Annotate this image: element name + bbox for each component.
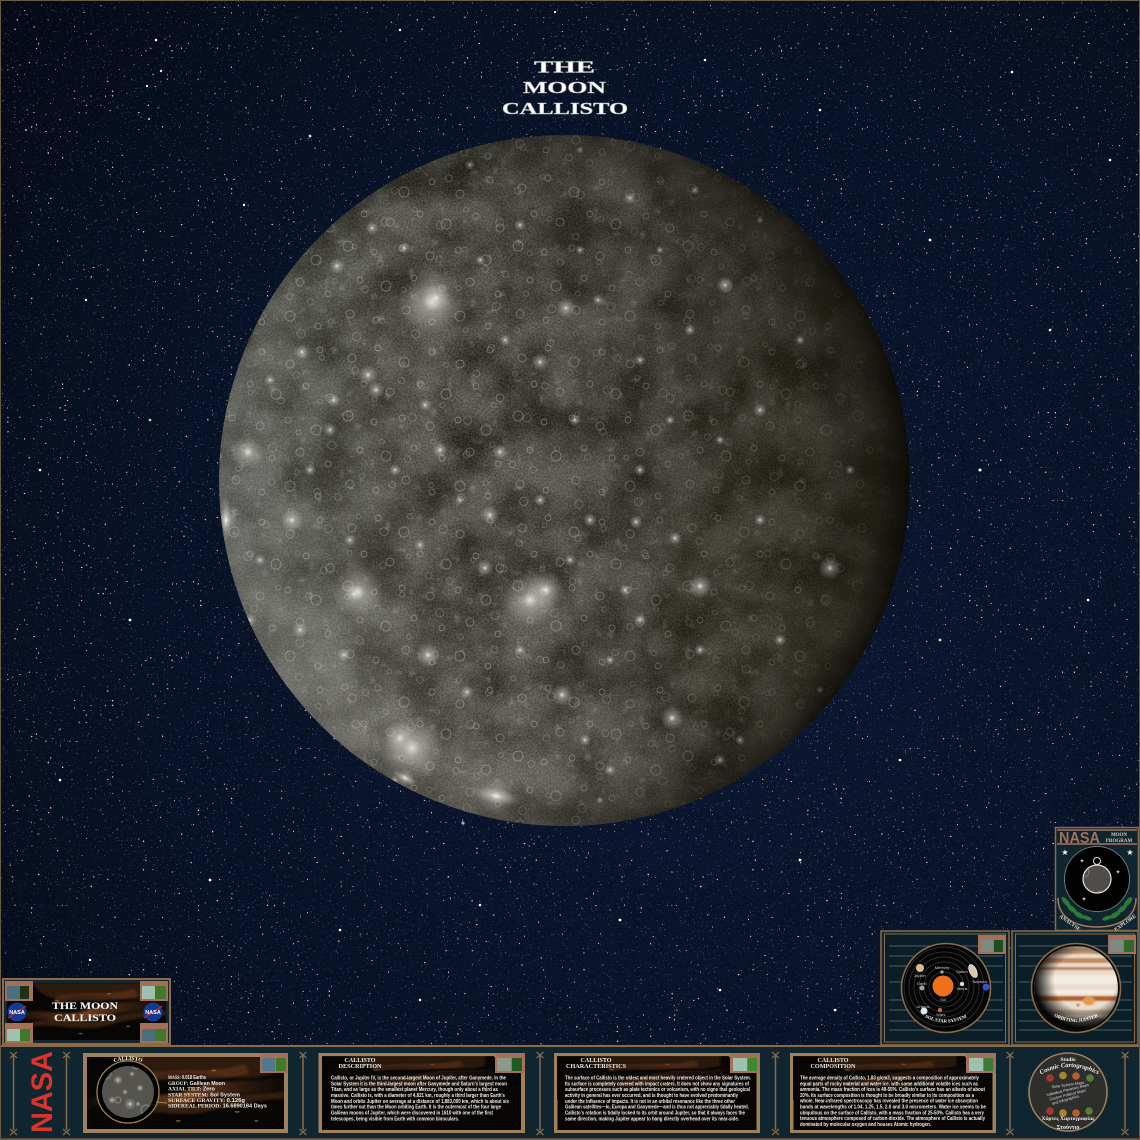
title: CALLISTO	[502, 99, 628, 118]
body text: subsurface processes such as plate tectonics or volcanism, with no signs that geological	[565, 1087, 750, 1093]
heading: CALLISTO	[580, 1057, 612, 1064]
corner tab	[966, 1053, 996, 1073]
patch badge with moon: ✦	[1081, 896, 1087, 903]
patch program label: PROGRAM	[1106, 839, 1132, 844]
body text: activity in general has ever occurred, and is thought to have evolved predominantly	[565, 1093, 738, 1099]
heading: CALLISTO	[344, 1057, 376, 1064]
patch program label: MOON	[1111, 833, 1127, 838]
patch badge with moon	[1064, 846, 1130, 912]
plaque corner tabs	[5, 981, 168, 1043]
moon thumbnail label	[109, 1060, 147, 1064]
body text: Callisto, or Jupiter IV, is the second-largest Moon of Jupiter, after Ganymede. In the	[331, 1076, 506, 1082]
body text: Titan, and as large as the smallest planet Mercury, though only about a third as	[331, 1087, 498, 1093]
medallion services: Solar System Maps	[1051, 1081, 1085, 1089]
surface tone	[219, 135, 911, 827]
heading	[338, 1057, 382, 1070]
title	[502, 58, 628, 118]
body text: telescopes, being visible from Earth with common binoculars.	[331, 1116, 459, 1122]
body text: equal parts of rocky material and water ice, with some additional volatile ices such as	[800, 1081, 978, 1087]
corner tab	[495, 1053, 525, 1073]
panel: sol star system	[880, 930, 1010, 1045]
corner tab	[978, 935, 1006, 954]
planet labels: Earth	[917, 981, 927, 986]
heading	[810, 1057, 856, 1070]
stats list: STAR SYSTEM: Sol System	[168, 1092, 240, 1098]
corner tab	[260, 1053, 288, 1073]
stats list: GROUP: Galilean Moon	[168, 1081, 225, 1087]
plaque heading: CALLISTO	[54, 1013, 116, 1023]
body text: tenuous atmosphere composed of carbon-dioxide. The atmosphere of Callisto is actually	[800, 1116, 985, 1122]
patch stars	[1061, 848, 1134, 857]
corner tab	[1108, 935, 1136, 954]
stats list	[168, 1075, 267, 1110]
body text: massive. Callisto is, with a diameter of 4,821 km, roughly a third larger than Earth's	[331, 1093, 505, 1099]
planet labels	[914, 965, 988, 1017]
body text: whole. Near-infrared spectroscopy has revealed the presence of water ice absorption	[799, 1099, 978, 1105]
patch motto: ANALYSE	[1058, 914, 1082, 933]
NASA worm logotype: NASA	[26, 1051, 59, 1133]
panel: description	[318, 1053, 525, 1133]
body text: bands at wavelengths of 1.04, 1.25, 1.5, 2.0 and 3.0 micrometers. Water ice seems to be	[800, 1104, 986, 1110]
corner tab	[730, 1053, 760, 1073]
NASA meatball left	[8, 1002, 26, 1022]
heading	[566, 1057, 627, 1070]
body text: Galilean moons of Jupiter, which were discovered in 1610 with one of the first	[331, 1111, 493, 1117]
medallion colored dots	[1046, 1072, 1094, 1117]
body text: 20%. Its surface composition is thought to be broadly similar to its composition as a	[800, 1093, 974, 1099]
stats list: MASS: 0.018 Earths	[168, 1075, 206, 1081]
medallion services: Individual Planetary Maps	[1046, 1083, 1089, 1097]
body text	[331, 1076, 509, 1122]
title plaque	[2, 978, 171, 1045]
body text: The surface of Callisto is the oldest and most heavily cratered object in the Solar System.	[565, 1076, 751, 1082]
NASA meatball right	[144, 1002, 162, 1022]
patch motto: EXPLORE	[1113, 913, 1138, 933]
heading: CHARACTERISTICS	[566, 1063, 627, 1070]
stats list: SURFACE GRAVITY: 0.126g	[168, 1098, 245, 1104]
heading: DESCRIPTION	[338, 1063, 382, 1070]
body text: same direction, making Jupiter appear to hang directly overhead over its near-side.	[565, 1116, 739, 1122]
body text: Solar System it is the third-largest moon after Ganymede and Saturn's largest moon	[331, 1081, 507, 1087]
patch badge with moon: ✦	[1079, 858, 1085, 865]
body text: times further out than the Moon orbiting Earth. It is the outermost of the four large	[331, 1105, 501, 1111]
body text: The average density of Callisto, 1.83 g/cm3, suggests a composition of approximately	[800, 1076, 979, 1082]
moon thumbnail	[97, 1061, 167, 1123]
orbit diagram: SOL STAR SYSTEM	[925, 1014, 967, 1022]
planet labels: Jupiter	[914, 973, 927, 978]
body text	[799, 1076, 986, 1128]
heading: COMPOSITION	[810, 1063, 856, 1070]
NASA meatball left: NASA	[9, 1010, 25, 1016]
studio medallion: Cosmic Cartographics	[1040, 1062, 1100, 1074]
bottom information bar	[0, 1045, 1140, 1140]
heading: CALLISTO	[818, 1057, 849, 1064]
stats list: SIDEREAL PERIOD: 16.6890184 Days	[168, 1104, 267, 1110]
panel: characteristics	[554, 1053, 760, 1133]
mission patch	[1056, 828, 1138, 933]
patch badge with moon: ✦	[1115, 869, 1121, 876]
medallion services: and Infographics	[1052, 1094, 1080, 1106]
medallion services: Custom Political Maps	[1049, 1089, 1087, 1102]
body text: ubiquitous on the surface of Callisto, with a mass fraction of 25-50%. Callisto has a very	[800, 1110, 984, 1116]
patch motto	[1058, 913, 1138, 933]
medallion services	[1046, 1081, 1089, 1106]
plaque heading	[52, 1001, 119, 1023]
body text: under the influence of impacts. It is not in an orbital resonance like the three other	[565, 1099, 735, 1105]
body text: dominated by molecular oxygen and houses Atomic hydrogen.	[800, 1122, 931, 1128]
planet labels: Venus	[956, 986, 968, 991]
body text	[565, 1076, 751, 1122]
panel: composition	[790, 1053, 996, 1133]
body text: Galilean satellites—Io, Europa and Ganymede—and is thus not appreciably tidally heated.	[565, 1105, 749, 1111]
body text: ammonia. The mass fraction of ices is 49-55%. Callisto's surface has an albedo of about	[800, 1087, 985, 1093]
patch stars: ★	[1061, 848, 1069, 857]
patch NASA wordmark: NASA	[1059, 830, 1100, 847]
planet labels: Saturn	[956, 969, 968, 974]
orbit diagram	[900, 942, 992, 1034]
plaque heading: THE MOON	[52, 1001, 119, 1011]
planet labels: Uranus	[917, 1004, 929, 1009]
title: MOON	[523, 78, 606, 97]
orbit diagram caption	[921, 1015, 971, 1022]
patch program label	[1106, 833, 1132, 844]
panel: moon stats	[83, 1053, 288, 1133]
stats list: AXIAL TILT: Zero	[168, 1087, 216, 1093]
body text: Its surface is completely covered with impact craters. It does not show any signatures of	[565, 1081, 749, 1087]
NASA meatball right: NASA	[145, 1010, 161, 1016]
body text: Callisto's rotation is tidally locked to its orbit around Jupiter, so that it always faces the	[565, 1111, 745, 1117]
panel: moon stats: CALLISTO	[114, 1056, 142, 1062]
planet labels: Mercury	[935, 965, 949, 970]
panel: orbiting jupiter	[1011, 930, 1139, 1045]
studio medallion	[1028, 1052, 1108, 1132]
title: THE	[534, 58, 595, 76]
bright ray craters	[214, 146, 855, 814]
medallion greek studio word: Στούντιο	[1057, 1123, 1079, 1131]
jupiter disc: ORBITING JUPITER	[1054, 1014, 1098, 1022]
planet labels: Sol	[940, 997, 946, 1002]
planets	[916, 963, 990, 1014]
medallion studio word: Studio	[1060, 1057, 1076, 1063]
sun	[932, 976, 954, 996]
patch stars: ★	[1126, 848, 1134, 857]
jupiter caption	[1050, 1014, 1102, 1022]
medallion arc text top	[1040, 1067, 1099, 1075]
planet labels: Neptune	[972, 979, 988, 984]
body text: Moon and orbits Jupiter on average at a distance of 1,883,000 km, which is about six	[331, 1099, 509, 1105]
laurel branches	[1060, 896, 1134, 922]
medallion arc text bottom: Χάρτες Χαρτογραφίας	[1042, 1114, 1095, 1122]
planet labels: Mars	[937, 1012, 945, 1017]
planet: Callisto	[214, 135, 911, 827]
